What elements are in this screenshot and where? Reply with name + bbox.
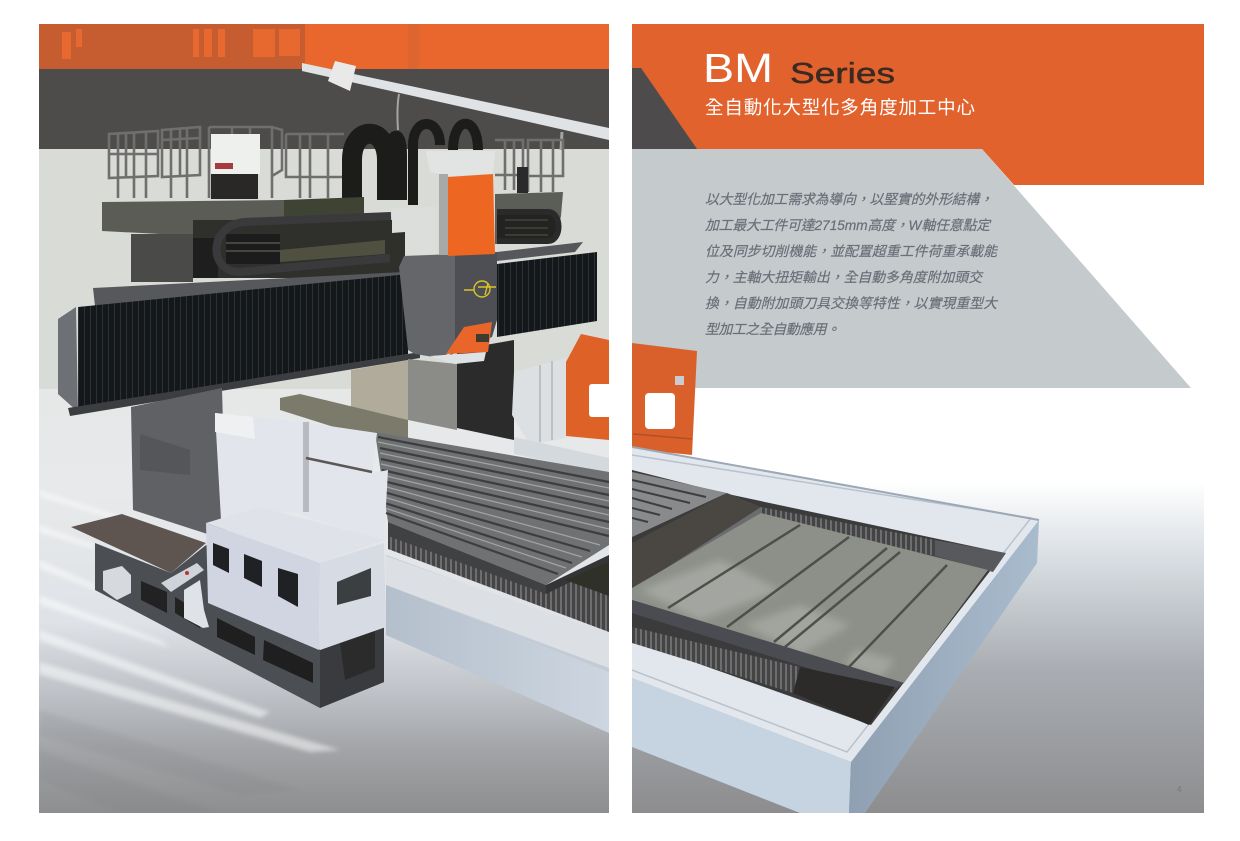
body text: 加工最大工件可達2715mm高度，W軸任意點定 <box>705 218 992 233</box>
vertical cable chains <box>352 124 478 205</box>
control cabinet on platform <box>211 134 260 199</box>
white head block and ram <box>392 151 495 256</box>
T-slot work table left <box>375 432 609 596</box>
title: Series <box>790 58 895 90</box>
body text: 力，主軸大扭矩輸出，全自動多角度附加頭交 <box>705 270 984 285</box>
operator cabin body <box>206 507 386 650</box>
subtitle: 全自動化大型化多角度加工中心 <box>705 97 975 118</box>
cabin dark base <box>95 543 384 708</box>
guard railings <box>109 127 563 198</box>
body text <box>705 192 998 337</box>
bed side face <box>386 555 609 733</box>
light strip behind table <box>514 437 609 474</box>
body text: 位及同步切削機能，並配置超重工件荷重承載能 <box>705 244 998 259</box>
orange top band <box>305 24 609 69</box>
background gradient <box>632 498 1204 813</box>
operator cabin white panels <box>215 413 388 518</box>
mesh section <box>632 493 761 590</box>
front mesh <box>632 627 800 693</box>
black box on right platform <box>517 167 528 193</box>
orange header <box>632 24 1204 185</box>
mesh way guard <box>388 535 609 632</box>
logo <box>464 281 496 297</box>
page number: 4 <box>1177 785 1182 794</box>
bed right face <box>849 520 1039 813</box>
rack strip and end block <box>761 507 1006 572</box>
spindle head housing <box>399 252 497 358</box>
work table end <box>632 472 727 537</box>
background wall and floor <box>39 388 609 813</box>
orange door continuation <box>632 343 697 455</box>
title: BM <box>703 45 773 91</box>
right side column behind beam <box>351 340 566 445</box>
body text: 型加工之全自動應用。 <box>705 322 840 337</box>
telescopic way covers <box>632 513 988 693</box>
panel: left page machine photo <box>39 24 611 813</box>
body text: 以大型化加工需求為導向，以堅實的外形結構， <box>705 192 993 207</box>
right upper platform <box>495 192 563 244</box>
gantry upper beam strip <box>93 272 408 306</box>
pit interior <box>632 470 1004 725</box>
panel: right page <box>632 24 1204 813</box>
control station brown top <box>71 514 206 573</box>
title <box>706 54 894 84</box>
orange door <box>566 334 611 440</box>
orange spindle cover <box>430 322 492 364</box>
overhead white cable arm <box>302 61 609 150</box>
light grey band <box>39 149 609 389</box>
dark triangle <box>632 68 697 149</box>
bed top surface <box>632 447 1039 762</box>
back table section <box>280 394 408 440</box>
floor soft shadows <box>42 715 62 724</box>
grey trapezoid <box>632 149 1191 388</box>
dark grey band <box>39 69 609 149</box>
bed left face <box>632 678 851 813</box>
gantry black way covers <box>58 252 597 416</box>
operator pendant control panel <box>161 563 209 628</box>
pit bottom <box>793 667 895 725</box>
floor subtle stripes <box>39 490 340 752</box>
body text: 換，自動附加頭刀具交換等特性，以實現重型大 <box>705 296 998 311</box>
upper platform <box>102 197 405 282</box>
lower left column <box>131 388 226 540</box>
